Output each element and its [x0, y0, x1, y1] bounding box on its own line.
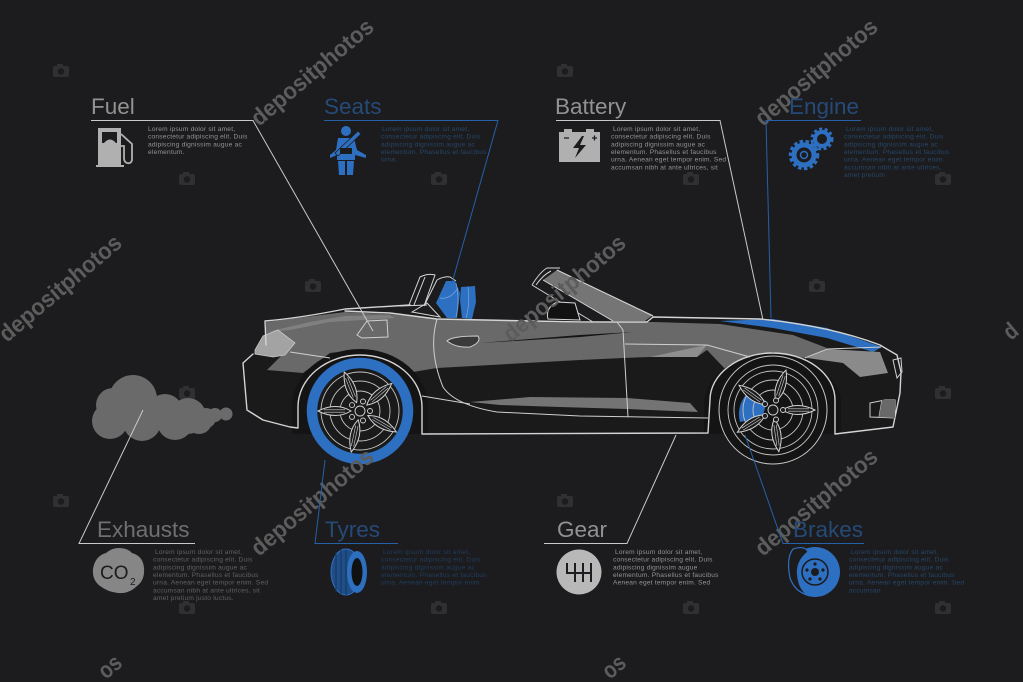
- car illustration: [243, 268, 902, 464]
- icon: brake disc: [789, 547, 840, 597]
- icon: seatbelt person: [330, 126, 366, 175]
- fuel text: adipiscing dignissim augue ac: [148, 141, 242, 148]
- engine heading: Engine: [789, 94, 859, 119]
- battery text: adipiscing dignissim augue ac: [611, 141, 705, 148]
- gear text: consectetur adipiscing elit. Duis: [613, 557, 713, 564]
- exhausts text: urna. Aenean eget tempor enim. Sed: [153, 580, 268, 587]
- fuel leader line: [91, 120, 373, 331]
- exhaust smoke cloud: [92, 375, 232, 441]
- panel: brakes: [745, 435, 964, 597]
- gear text: adipiscing dignissim augue: [613, 564, 698, 571]
- battery text: consectetur adipiscing elit. Duis: [611, 134, 711, 141]
- gear leader line: [544, 435, 676, 544]
- exhausts text: accumsan nibh at ante ultrices, sit: [153, 587, 260, 594]
- tyres text: consectetur adipiscing elit. Duis: [381, 557, 481, 564]
- icon: CO2 cloud: 2: [130, 577, 136, 588]
- fuel text: elementum.: [148, 149, 185, 156]
- panel: exhausts: [79, 410, 268, 602]
- exhausts text: amet pretium justo luctus.: [153, 595, 234, 602]
- engine text: elementum. Phasellus et faucibus: [844, 149, 950, 156]
- tyres heading: Tyres: [325, 517, 380, 542]
- icon: gear stick: [556, 550, 602, 594]
- icon: tyre: [331, 549, 367, 595]
- watermarks: depositphotos: [246, 13, 379, 131]
- tyres text: adipiscing dignissim augue ac: [381, 564, 475, 571]
- engine text: amet pretium: [844, 172, 885, 179]
- stock camera marks: [53, 64, 951, 614]
- engine text: adipiscing dignissim augue ac: [844, 141, 938, 148]
- seats text: urna.: [381, 157, 397, 164]
- watermarks: depositphotos: [750, 443, 883, 561]
- highlighted blue seats: [436, 281, 476, 319]
- tyres text: urna. Aenean eget tempor enim.: [381, 580, 482, 587]
- engine text: accumsan nibh at ante ultrices,: [844, 164, 942, 171]
- brakes text: urna. Aenean eget tempor enim. Sed: [849, 580, 964, 587]
- brakes leader line: [745, 435, 864, 544]
- blue hood stripe: [720, 319, 882, 352]
- exhausts text: adipiscing dignissim augue ac: [153, 564, 247, 571]
- icon: CO2 cloud: CO: [100, 563, 128, 584]
- headlight: [807, 349, 888, 377]
- front wheel: [719, 356, 827, 464]
- car outline: [243, 305, 901, 434]
- exhausts text: Lorem ipsum dolor sit amet,: [155, 549, 242, 556]
- rear wheel: [312, 363, 408, 459]
- brakes text: Lorem ipsum dolor sit amet,: [851, 549, 938, 556]
- tyres text: elementum. Phasellus et faucibus: [381, 572, 487, 579]
- icon: gears: [790, 129, 832, 168]
- exhausts heading: Exhausts: [97, 517, 190, 542]
- upper body highlight: [267, 315, 395, 332]
- brakes text: adipiscing dignissim augue ac: [849, 564, 943, 571]
- watermarks: depositphotos: [750, 13, 883, 131]
- battery text: elementum. Phasellus et faucibus: [611, 149, 717, 156]
- panel: engine: [766, 94, 950, 318]
- front seat and wheel outline: [547, 302, 580, 320]
- brakes text: consectetur adipiscing elit. Duis: [849, 557, 949, 564]
- folded roof: [543, 270, 653, 321]
- front fender vent: [650, 345, 707, 357]
- car body grey panel: [266, 312, 827, 373]
- exhausts leader line: [79, 410, 195, 544]
- fuel text: consectetur adipiscing elit. Duis: [148, 134, 248, 141]
- exhausts text: elementum. Phasellus et faucibus: [153, 572, 259, 579]
- battery text: accumsan nibh at ante ultrices, sit: [611, 164, 718, 171]
- rear headrests: [400, 274, 456, 317]
- tyres leader line: [315, 460, 398, 544]
- door crease: [480, 332, 633, 343]
- wheel arch shadow: [292, 349, 841, 434]
- seats text: Lorem ipsum dolor sit amet,: [382, 126, 469, 133]
- tyres text: Lorem ipsum dolor sit amet,: [383, 549, 470, 556]
- brakes text: elementum. Phasellus et faucibus: [849, 572, 955, 579]
- exhausts text: consectetur adipiscing elit. Duis: [153, 557, 253, 564]
- battery leader line: [556, 120, 763, 320]
- engine leader line: [766, 120, 861, 318]
- watermarks: depositphotos: [498, 229, 631, 347]
- watermarks: depositphotos: [246, 443, 379, 561]
- brakes heading: Brakes: [793, 517, 863, 542]
- taillight: [255, 330, 295, 357]
- panel: gear: [544, 435, 719, 594]
- gear text: elementum. Phasellus et faucibus: [613, 572, 719, 579]
- fuel heading: Fuel: [91, 94, 135, 119]
- gear text: Aenean eget tempor enim. Sed: [613, 580, 711, 587]
- seats text: adipiscing dignissim augue ac: [381, 141, 475, 148]
- engine text: consectetur adipiscing elit. Duis: [844, 134, 944, 141]
- panel: fuel: [91, 94, 373, 331]
- seats text: elementum. Phasellus et faucibus: [381, 149, 487, 156]
- seats heading: Seats: [324, 94, 382, 119]
- car body lower silhouette: [243, 310, 901, 435]
- seats text: consectetur adipiscing elit. Duis: [381, 134, 481, 141]
- engine text: Lorem ipsum dolor sit amet,: [846, 126, 933, 133]
- panel: battery: [555, 94, 763, 320]
- icon: fuel pump: [96, 128, 132, 167]
- battery text: Lorem ipsum dolor sit amet,: [613, 126, 700, 133]
- gear text: Lorem ipsum dolor sit amet,: [615, 549, 702, 556]
- gear heading: Gear: [557, 517, 608, 542]
- engine text: urna. Aenean eget tempor enim.: [844, 157, 945, 164]
- battery text: urna. Aenean eget tempor enim. Sed: [611, 157, 726, 164]
- icon: CO2 cloud: [93, 548, 144, 593]
- panel: tyres: [315, 460, 487, 595]
- door shine strip: [470, 397, 698, 412]
- door lines and handle: [290, 319, 881, 418]
- windscreen frame lines: [532, 268, 653, 322]
- brakes text: accumsan: [849, 587, 881, 594]
- fuel text: Lorem ipsum dolor sit amet,: [148, 126, 235, 133]
- panel: seats: [324, 94, 498, 283]
- front lamps: [870, 358, 902, 418]
- icon: battery: [559, 129, 600, 162]
- seats leader line: [324, 120, 498, 283]
- battery heading: Battery: [555, 94, 627, 119]
